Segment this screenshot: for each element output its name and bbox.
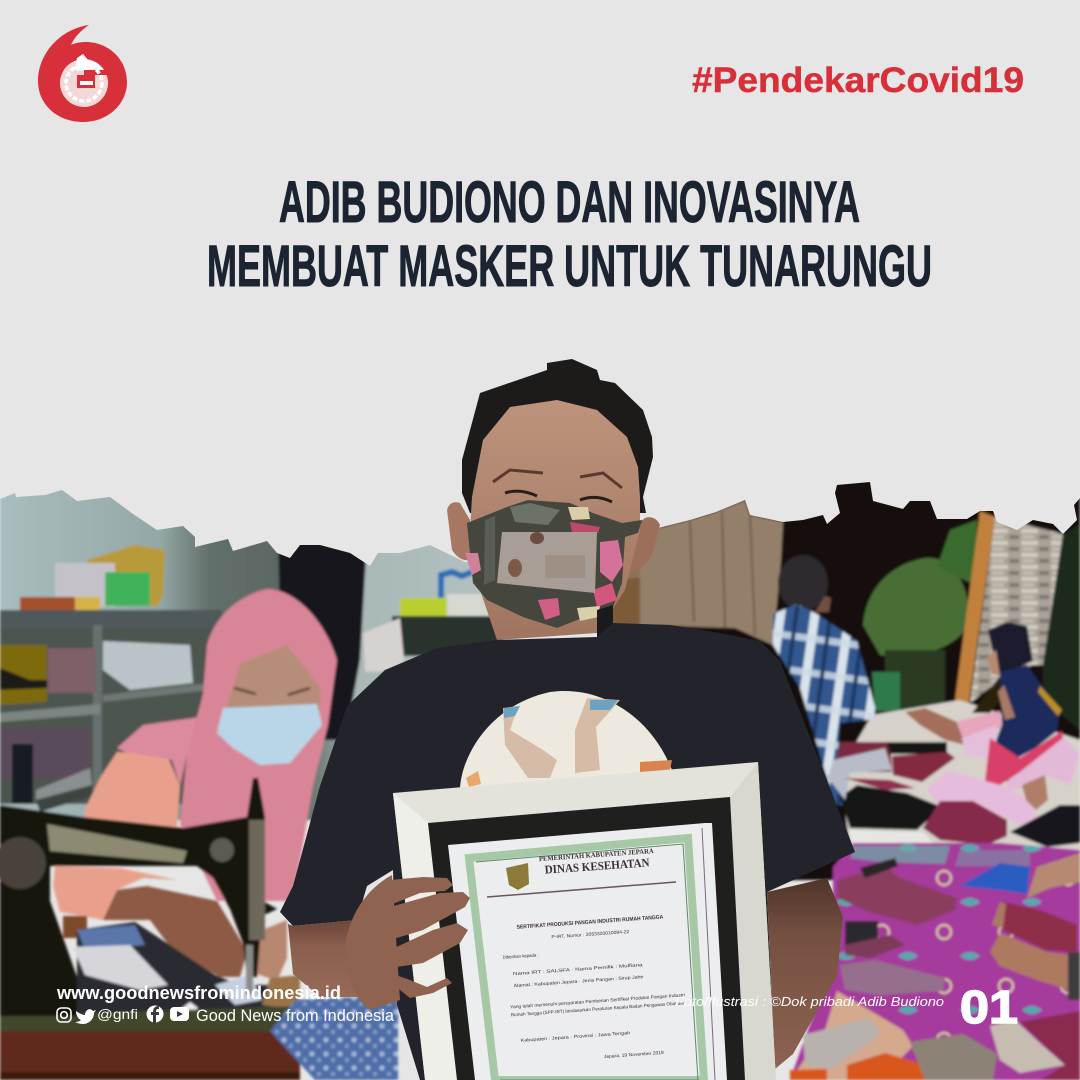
certificate text: Jepara, 19 November 2019 — [604, 1050, 664, 1059]
certificate text: Rumah Tangga (SPP-IRT) berdasarkan Peraturan Kepala Badan Pengawas Obat dan — [511, 1000, 686, 1017]
icon: facebook — [146, 1006, 164, 1023]
website and social footer: www.goodnewsfromindonesia.id — [56, 983, 341, 1003]
website and social footer — [56, 983, 395, 1025]
page number: 01 — [960, 981, 1018, 1033]
lower sleeve and forearm — [53, 866, 177, 920]
man in plaid shirt — [773, 555, 937, 830]
dark trousers — [840, 785, 937, 830]
ears — [447, 502, 470, 560]
certificate paper — [448, 823, 727, 1080]
certificate text: PEMERINTAH KABUPATEN JEPARA — [539, 847, 654, 863]
certificate text: Nama IRT : SALSFA · Nama Pemilik : Mulfiana — [513, 962, 643, 976]
photo credit: Foto/Ilustrasi : ©Dok pribadi Adib Budiono — [675, 994, 944, 1009]
toys behind the man — [441, 572, 472, 598]
fabric on table — [0, 916, 398, 1080]
hijab — [180, 589, 337, 901]
photo background scene — [0, 480, 1080, 1080]
right arm — [767, 878, 843, 1069]
icon: instagram — [57, 1008, 71, 1022]
certificate text: SERTIFIKAT PRODUKSI PANGAN INDUSTRI RUMAH TANGGA — [516, 915, 664, 931]
website and social footer: Good News from Indonesia — [196, 1006, 395, 1025]
floor — [840, 700, 1080, 850]
face — [470, 400, 640, 640]
hand and fingers — [345, 875, 470, 1010]
icon: youtube — [170, 1007, 189, 1021]
certificate text: Alamat : Kabupaten Jepara · Jenis Pangan : Sirup Jahe — [514, 974, 644, 988]
certificate frame — [393, 762, 776, 1080]
women in hijab — [905, 622, 1080, 825]
apron and sleeve — [85, 752, 180, 830]
certificate text: P-IRT. Nomor : 2053320010084-22 — [551, 929, 630, 939]
emblem — [506, 863, 529, 890]
shirt logo — [460, 691, 672, 790]
mask — [465, 500, 642, 640]
face — [227, 645, 320, 712]
certificate text: Yang telah memenuhi persyaratan Pemberian Sertifikat Produksi Pangan Industri — [510, 992, 685, 1009]
logo — [38, 25, 127, 122]
certificate text: Kabupaten : Jepara · Provinsi : Jawa Tengah — [520, 1030, 631, 1043]
certificate text: DINAS KESEHATAN — [544, 855, 650, 877]
icon: twitter — [75, 1009, 96, 1024]
certificate text: Diberikan kepada : — [503, 952, 539, 960]
patterned cloth — [790, 843, 1080, 1080]
central man — [280, 359, 855, 1080]
t-shirt — [280, 623, 855, 1080]
panel: right workshop — [600, 480, 1080, 1080]
title — [207, 170, 932, 299]
left arm — [288, 920, 397, 1008]
certificate text — [496, 846, 689, 1066]
panel: left workshop — [0, 480, 502, 820]
hair — [462, 359, 653, 513]
surgical mask — [217, 704, 322, 765]
hashtag: #PendekarCovid19 — [692, 61, 1024, 100]
website and social footer: @gnfi — [97, 1006, 138, 1022]
cloth and mask piles — [828, 742, 1080, 847]
woman at sewing machine — [53, 589, 337, 981]
sewing machine — [0, 778, 277, 1016]
